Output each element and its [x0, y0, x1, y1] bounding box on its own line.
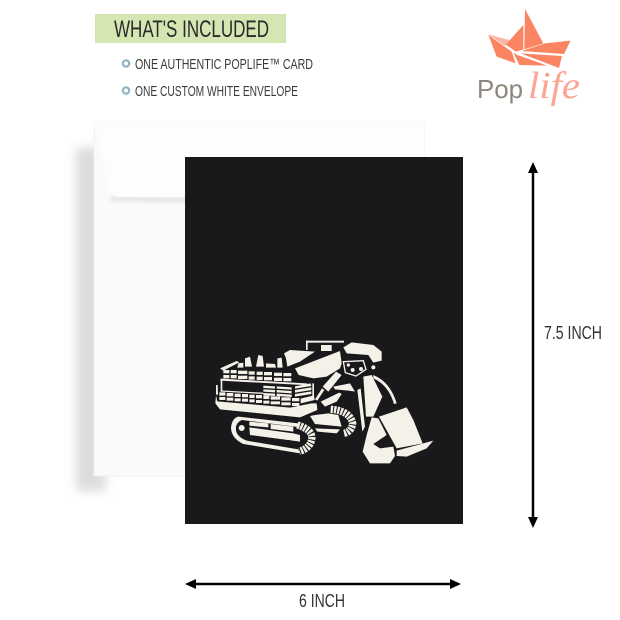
list item: card: ONE AUTHENTIC POPLIFE™ CARD [135, 56, 313, 73]
engine top details [220, 341, 344, 371]
envelope [94, 122, 424, 476]
logo wordmark: life [528, 65, 580, 107]
heading: what's included: WHAT'S INCLUDED [114, 16, 269, 43]
upper body grille [220, 370, 314, 398]
front track [310, 409, 353, 433]
envelope flap [94, 122, 424, 205]
arrow: width dimension [185, 579, 461, 589]
boom and cab [295, 342, 397, 432]
logo wordmark: Pop [477, 74, 523, 104]
label: 7.5 inch: 7.5 INCH [544, 323, 602, 343]
bucket [363, 407, 433, 463]
list item: envelope: ONE CUSTOM WHITE ENVELOPE [135, 83, 298, 100]
list item: card [123, 56, 313, 73]
rear track [231, 417, 312, 453]
envelope shadow [76, 148, 106, 491]
logo wordmark [477, 65, 580, 107]
pop-up card [185, 157, 463, 524]
heading: what's included [95, 14, 286, 43]
excavator cutout [215, 341, 433, 463]
label: 6 inch: 6 INCH [299, 591, 345, 611]
icon: paper boat [488, 9, 571, 68]
logo: poplife origami boat [477, 9, 580, 107]
list: included items [123, 56, 313, 100]
list item: envelope [123, 83, 298, 100]
arrow: height dimension [528, 162, 538, 528]
lower deck [215, 385, 317, 417]
